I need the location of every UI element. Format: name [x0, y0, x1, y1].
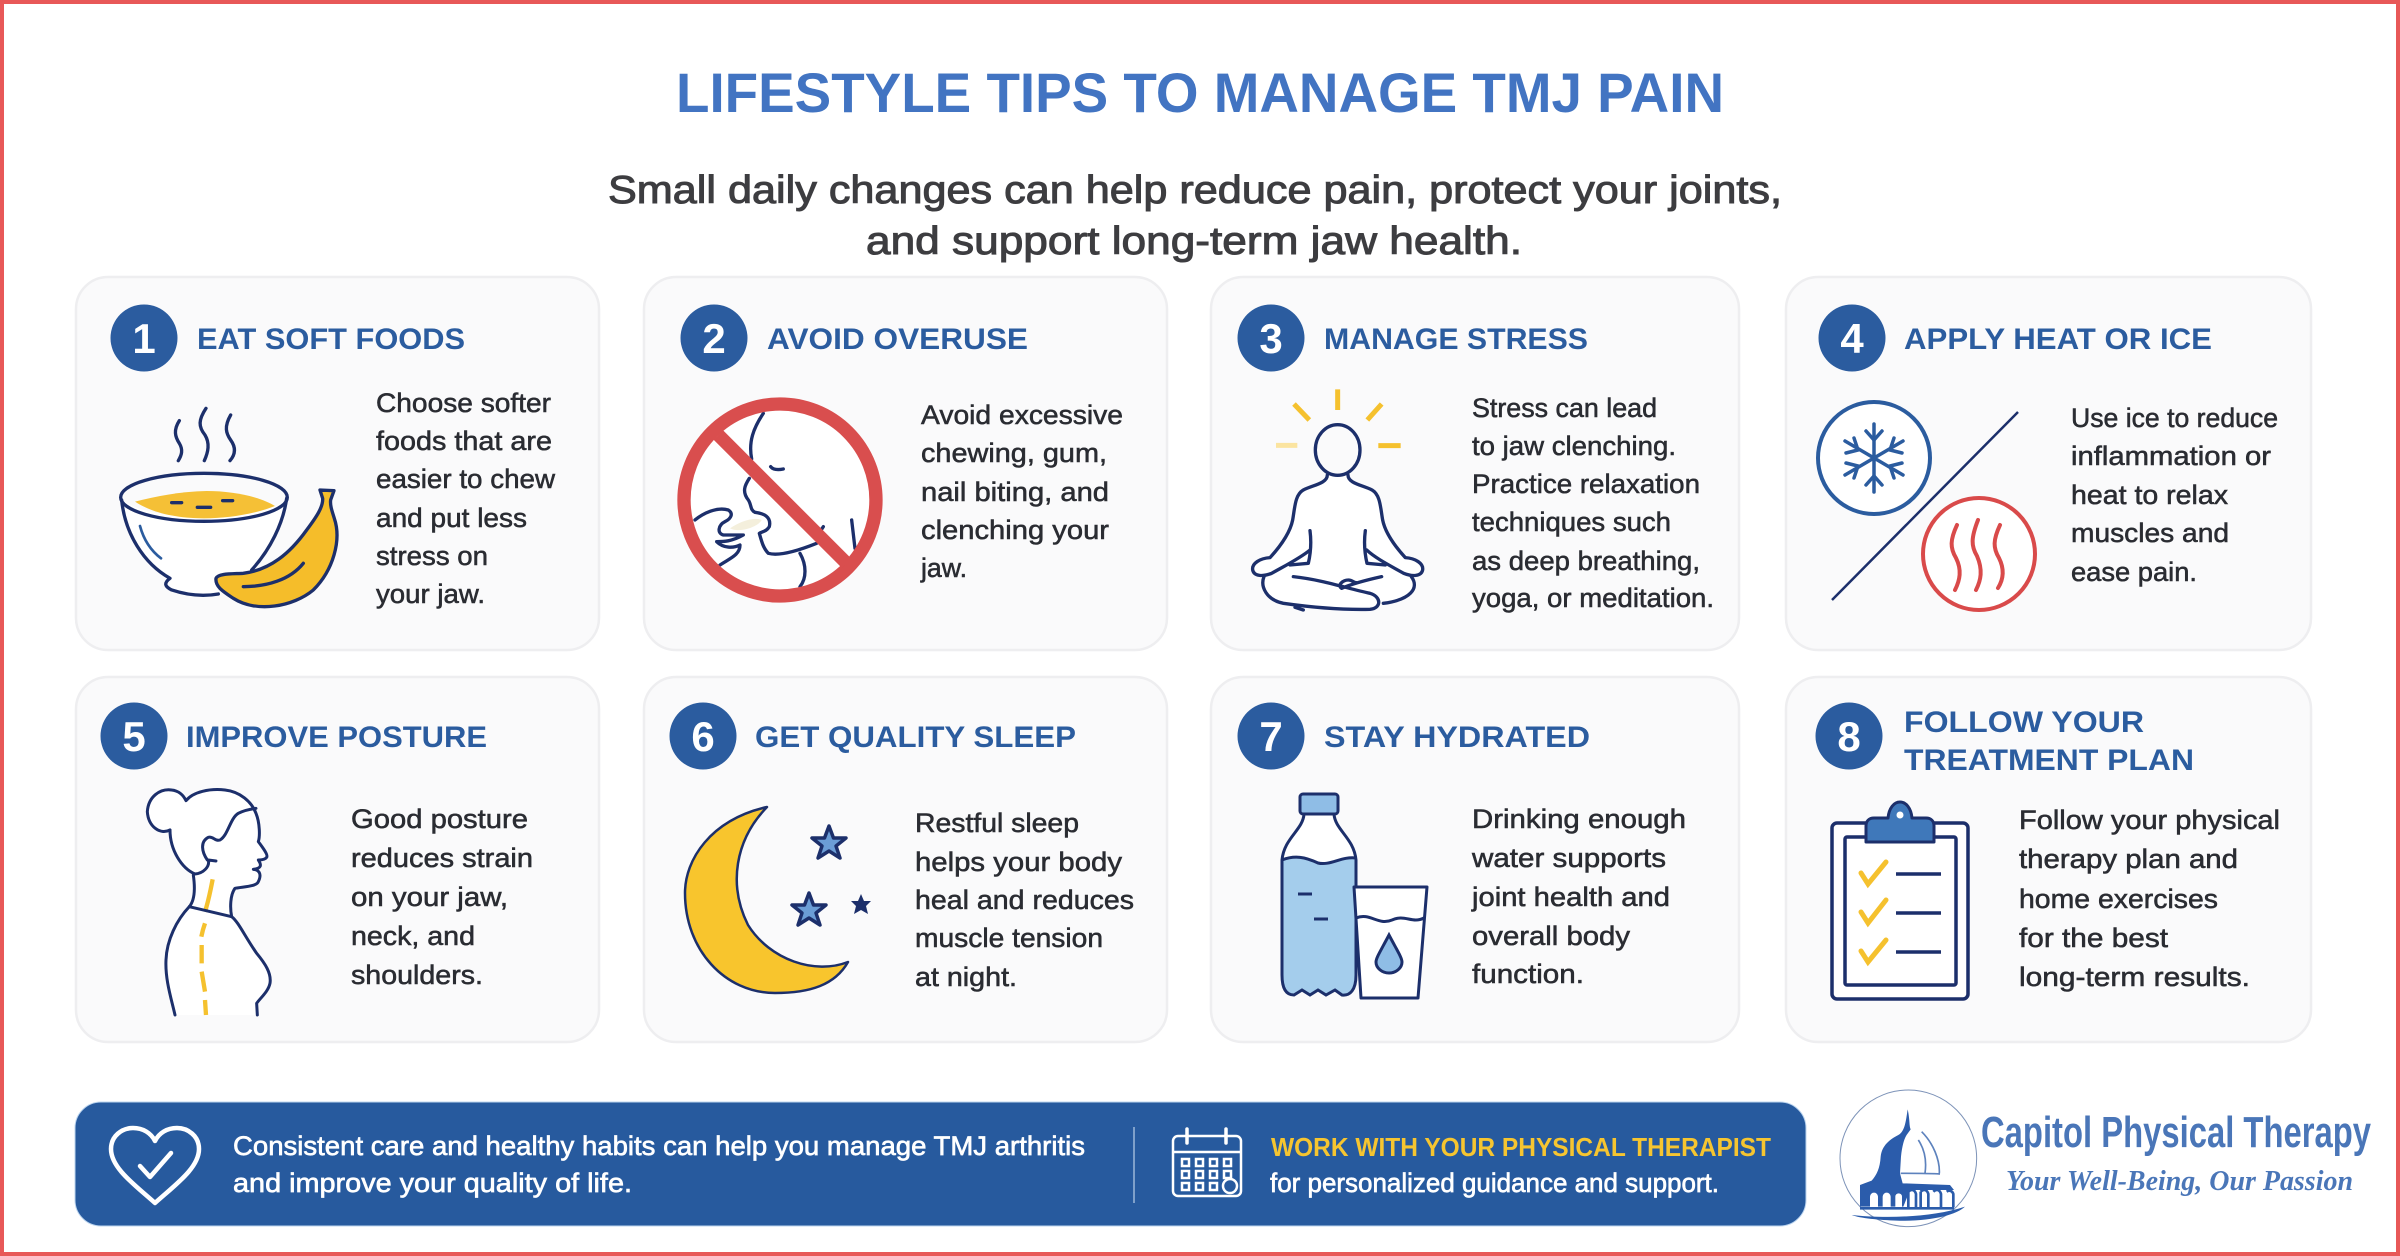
body text: yoga, or meditation.	[1472, 583, 1714, 613]
body text: Drinking enough	[1472, 804, 1686, 834]
body text: Restful sleep	[915, 808, 1079, 838]
body text: inflammation or	[2071, 441, 2271, 471]
body text: muscles and	[2071, 518, 2229, 548]
icon: clipboard checklist	[1832, 802, 1968, 999]
heading: stay hydrated: STAY HYDRATED	[1324, 721, 1590, 754]
body text: heat to relax	[2071, 480, 2229, 510]
panel: get quality sleep	[644, 677, 1167, 1042]
icon: moon and stars	[685, 807, 871, 993]
heading: follow your treatment plan: FOLLOW YOUR	[1904, 706, 2144, 739]
number badge 5: 5	[122, 713, 146, 760]
panel: manage stress	[1211, 277, 1739, 650]
heading: get quality sleep: GET QUALITY SLEEP	[755, 721, 1076, 754]
number badge 1: 1	[132, 315, 156, 362]
panel: eat soft foods	[76, 277, 599, 650]
body text: foods that are	[376, 426, 552, 456]
body text: long-term results.	[2019, 962, 2250, 992]
body text: techniques such	[1472, 507, 1671, 537]
body text: reduces strain	[351, 843, 533, 873]
body text	[351, 804, 533, 990]
heading: avoid overuse: AVOID OVERUSE	[767, 323, 1028, 356]
number badge 2	[680, 304, 748, 372]
number badge 8: 8	[1837, 713, 1861, 760]
heading: manage stress: MANAGE STRESS	[1324, 323, 1588, 356]
body text: stress on	[376, 541, 488, 571]
body text: muscle tension	[915, 923, 1103, 953]
body text: as deep breathing,	[1472, 546, 1700, 576]
callout: work with your physical therapist	[1270, 1132, 1771, 1198]
body text: to jaw clenching.	[1472, 431, 1676, 461]
body text: for the best	[2019, 923, 2169, 953]
body text: helps your body	[915, 847, 1123, 877]
number badge 1	[110, 304, 178, 372]
number badge 6: 6	[691, 713, 715, 760]
body text: Practice relaxation	[1472, 469, 1700, 499]
icon: posture profile	[147, 790, 270, 1015]
number badge 4	[1818, 304, 1886, 372]
number badge 3: 3	[1259, 315, 1283, 362]
number badge 2: 2	[702, 315, 726, 362]
number badge 4: 4	[1840, 315, 1864, 362]
callout: work with your physical therapist: WORK WITH YOUR PHYSICAL THERAPIST	[1271, 1132, 1771, 1162]
icon: no chewing sign	[684, 404, 876, 596]
icon: ice and heat	[1818, 402, 2035, 610]
logo: capitol physical therapy	[1840, 1090, 2371, 1227]
body text: Avoid excessive	[921, 400, 1123, 430]
body text	[915, 808, 1134, 992]
panel: apply heat or ice	[1786, 277, 2311, 650]
logo mark: capitol dome	[1840, 1090, 1977, 1227]
panel: follow your treatment plan	[1786, 677, 2311, 1042]
body text: your jaw.	[376, 579, 485, 609]
body text: Use ice to reduce	[2071, 403, 2278, 433]
body text	[2019, 805, 2280, 992]
logo tagline: Your Well-Being, Our Passion	[2006, 1165, 2353, 1197]
body text	[2071, 403, 2278, 587]
body text: easier to chew	[376, 464, 556, 494]
callout: work with your physical therapist: for personalized guidance and support.	[1270, 1168, 1719, 1198]
body text: neck, and	[351, 921, 475, 951]
banner message: Consistent care and healthy habits can help you manage TMJ arthritis	[233, 1131, 1085, 1161]
subtitle: Small daily changes can help reduce pain, protect your joints,	[608, 169, 1782, 212]
panel: avoid overuse	[644, 277, 1167, 650]
body text: chewing, gum,	[921, 438, 1107, 468]
banner message	[233, 1131, 1085, 1198]
heading: eat soft foods: EAT SOFT FOODS	[197, 323, 465, 356]
heading: improve posture: IMPROVE POSTURE	[186, 721, 487, 754]
heading: apply heat or ice: APPLY HEAT OR ICE	[1904, 323, 2212, 356]
body text: on your jaw,	[351, 882, 508, 912]
number badge 6	[670, 702, 736, 770]
body text: function.	[1472, 959, 1584, 989]
body text: Stress can lead	[1472, 393, 1657, 423]
icon: calendar	[1173, 1129, 1241, 1196]
body text: ease pain.	[2071, 557, 2197, 587]
subtitle: and support long-term jaw health.	[866, 220, 1522, 263]
body text: Follow your physical	[2019, 805, 2280, 835]
body text: Good posture	[351, 804, 528, 834]
body text: and put less	[376, 503, 527, 533]
banner: consistent care	[75, 1102, 1806, 1226]
number badge 3	[1238, 304, 1304, 372]
icon: heart with check	[111, 1128, 199, 1203]
panel: improve posture	[76, 677, 599, 1042]
icon: meditating figure	[1253, 389, 1423, 610]
body text: Choose softer	[376, 388, 551, 418]
heading: follow your treatment plan: TREATMENT PLAN	[1904, 744, 2194, 777]
body text: overall body	[1472, 921, 1631, 951]
body text: water supports	[1471, 843, 1666, 873]
number badge 7	[1238, 702, 1304, 770]
title: LIFESTYLE TIPS TO MANAGE TMJ PAIN	[676, 61, 1724, 124]
body text	[1471, 804, 1686, 989]
body text	[376, 388, 556, 609]
body text: home exercises	[2019, 884, 2218, 914]
subtitle	[608, 169, 1782, 263]
icon: water bottle and glass	[1282, 794, 1427, 998]
number badge 5	[100, 702, 168, 770]
number badge 7: 7	[1259, 713, 1283, 760]
body text	[1472, 393, 1714, 613]
body text: joint health and	[1471, 882, 1670, 912]
body text	[920, 400, 1123, 583]
body text: shoulders.	[351, 960, 483, 990]
body text: heal and reduces	[915, 885, 1134, 915]
body text: therapy plan and	[2019, 844, 2238, 874]
body text: nail biting, and	[921, 477, 1109, 507]
body text: at night.	[915, 962, 1017, 992]
heading: follow your treatment plan	[1904, 706, 2194, 777]
number badge 8	[1816, 702, 1882, 770]
body text: jaw.	[920, 553, 967, 583]
icon: soup bowl and banana	[121, 408, 337, 607]
body text: clenching your	[921, 515, 1109, 545]
panel: stay hydrated	[1211, 677, 1739, 1042]
banner message: and improve your quality of life.	[233, 1168, 632, 1198]
